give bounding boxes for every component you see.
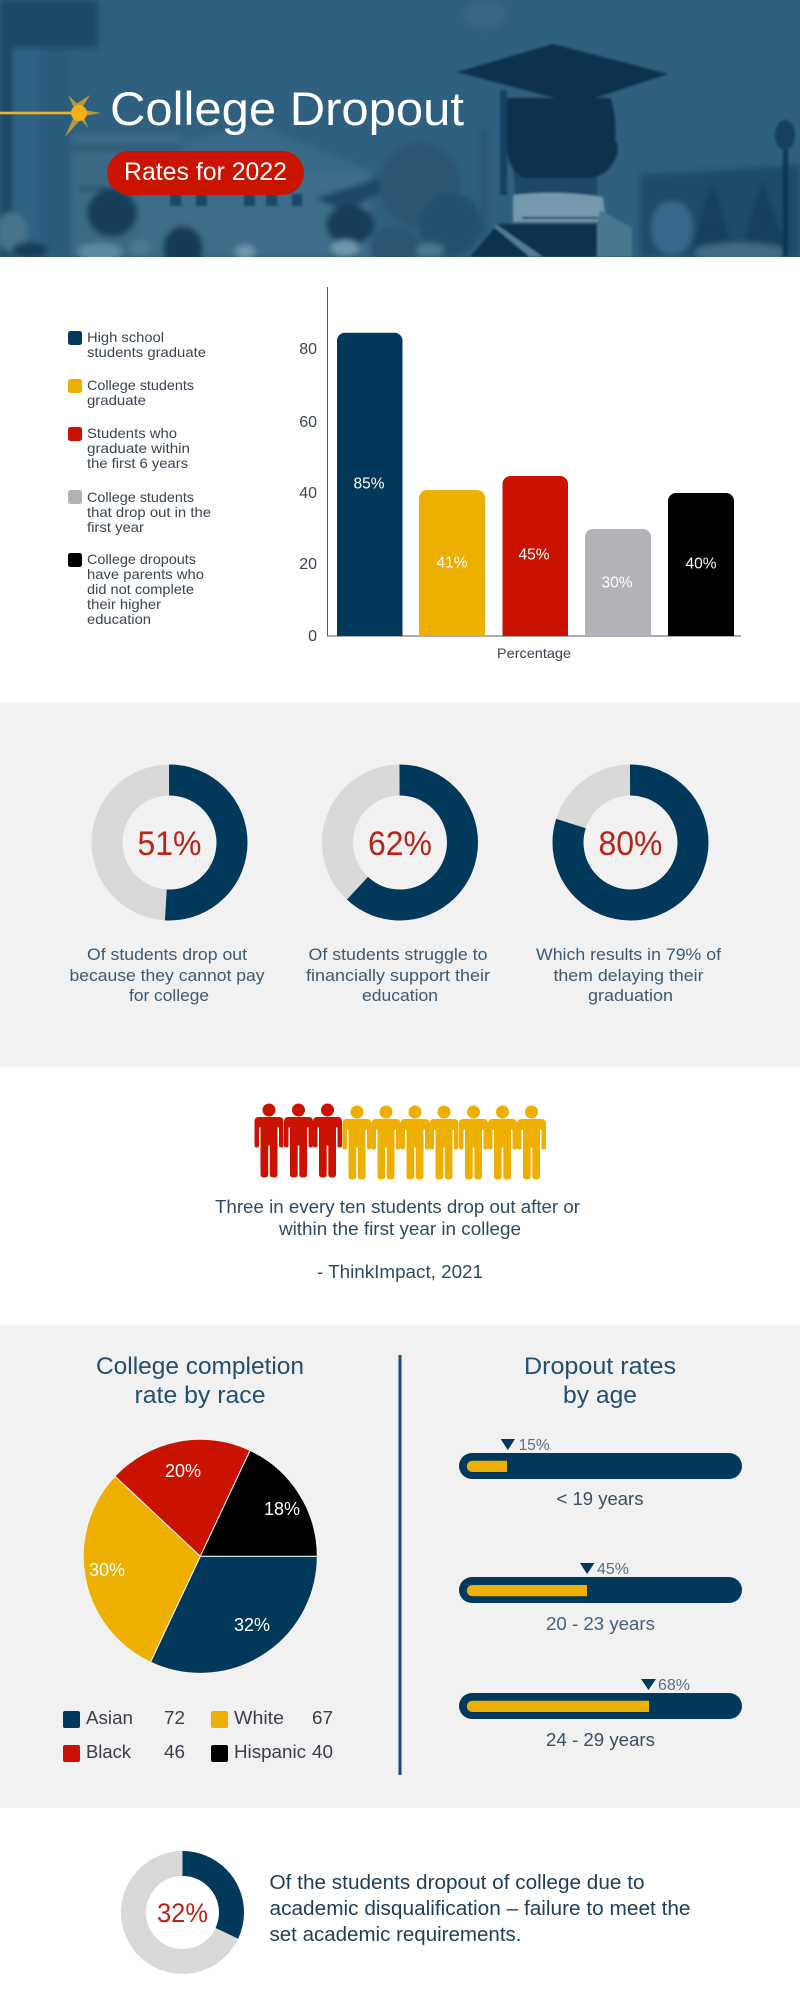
legend item: drop out first year: that drop out in the: [87, 504, 211, 520]
pie legend: 72: [164, 1708, 185, 1728]
progress bar: 20 to 23: [459, 1561, 742, 1634]
y axis labels: 40: [299, 485, 317, 502]
text: academic disqualification: academic disqualification – failure to meet the: [270, 1898, 690, 1920]
caption: 62%: education: [362, 986, 438, 1005]
pie chart: 20%: [165, 1461, 201, 1481]
pie legend: 40: [312, 1742, 333, 1762]
legend: bar chart: [68, 329, 211, 627]
caption: 80%: them delaying their: [554, 966, 704, 985]
caption: 51%: for college: [129, 986, 209, 1005]
donut: 62%: 62%: [368, 825, 432, 863]
bar: 45%: [502, 476, 568, 636]
x axis label: Percentage: [497, 645, 571, 661]
bar: 30%: [585, 529, 651, 636]
bar: 41%: 41%: [436, 554, 468, 572]
bar: 40%: [668, 493, 734, 636]
progress bar: 24 to 29: [459, 1677, 742, 1750]
pie chart: 18%: [264, 1499, 300, 1519]
legend item: high school: High school: [87, 329, 164, 345]
legend item: graduate within 6 years: [68, 425, 190, 471]
heading: dropout rates by age: Dropout rates: [524, 1353, 676, 1380]
caption: 51%: because they cannot pay: [70, 966, 265, 985]
legend item: drop out first year: College students: [87, 489, 194, 505]
bar: 85%: [337, 333, 402, 636]
legend item: parents without higher education: [68, 551, 204, 627]
donut: 80%: 80%: [598, 825, 662, 863]
heading: college completion: College completion: [96, 1353, 304, 1380]
bar: 40%: 40%: [685, 556, 717, 572]
pictogram: three in ten students: [254, 1104, 546, 1180]
pie chart: 30%: [89, 1560, 125, 1580]
title: College Dropout: [110, 82, 464, 135]
progress bar: 20 to 23: 45%: [597, 1561, 629, 1578]
legend item: parents without higher education: did not complete: [87, 581, 194, 597]
header banner: [0, 0, 800, 270]
text: academic disqualification: set academic requirements.: [270, 1924, 522, 1946]
legend item: college students graduate: [68, 377, 194, 408]
subtitle pill: Rates for 2022: [124, 158, 287, 186]
subtitle pill: [107, 151, 304, 195]
legend item: drop out first year: first year: [87, 519, 144, 535]
legend item: high school: [68, 329, 206, 360]
y axis labels: 80: [299, 341, 317, 358]
progress bar: 20 to 23: 20 - 23 years: [546, 1614, 655, 1634]
donut: 32% academic disqualification: [134, 1864, 232, 1962]
donut: 62%: [338, 780, 462, 905]
pie legend: [63, 1708, 333, 1762]
pie chart: 32%: [234, 1615, 270, 1635]
bar: 85%: 85%: [353, 476, 385, 492]
legend item: graduate within 6 years: Students who: [87, 425, 177, 441]
legend item: high school: students graduate: [87, 344, 206, 360]
pie chart: [83, 1439, 317, 1673]
source: ThinkImpact: - ThinkImpact, 2021: [317, 1262, 483, 1282]
donut: 80%: [568, 780, 693, 905]
heading: college completion: rate by race: [134, 1382, 266, 1409]
star with line: [0, 95, 101, 137]
y axis labels: 20: [299, 556, 317, 573]
legend item: graduate within 6 years: the first 6 years: [87, 455, 188, 471]
bar chart: [299, 287, 741, 661]
pie legend: Asian: [86, 1708, 133, 1728]
text: academic disqualification: Of the students dropout of college due to: [270, 1872, 644, 1894]
legend item: college students graduate: College students: [87, 377, 194, 393]
bar: 45%: 45%: [518, 546, 550, 564]
progress bar: 24 to 29: 24 - 29 years: [546, 1730, 655, 1750]
legend item: drop out first year: [68, 489, 211, 535]
text: academic disqualification: [270, 1872, 690, 1946]
legend item: parents without higher education: education: [87, 611, 151, 627]
y axis labels: 60: [299, 414, 317, 431]
panel: race and age: [0, 1325, 800, 1808]
pie legend: 67: [312, 1708, 333, 1728]
y axis labels: [299, 341, 317, 645]
donut: 51%: 51%: [138, 825, 202, 863]
legend item: graduate within 6 years: graduate within: [87, 440, 190, 456]
legend item: parents without higher education: College dropouts: [87, 551, 196, 567]
caption: 80%: graduation: [588, 986, 673, 1005]
caption: 62%: [306, 945, 490, 1005]
progress bar: under 19: [459, 1437, 742, 1509]
legend item: parents without higher education: have parents who: [87, 566, 204, 582]
heading: dropout rates by age: [524, 1353, 676, 1409]
bar: 30%: 30%: [601, 574, 633, 592]
donut: 32% academic disqualification: 32%: [157, 1898, 208, 1928]
legend item: parents without higher education: their higher: [87, 596, 161, 612]
caption: 51%: [70, 945, 265, 1005]
pie legend: 46: [164, 1742, 185, 1762]
caption: 80%: [536, 945, 721, 1005]
text: three in ten: Three in every ten students drop out after or: [215, 1197, 580, 1217]
panel: donut statistics: [0, 703, 800, 1067]
bar: 41%: [419, 490, 485, 636]
donut: 51%: [107, 780, 232, 905]
text: three in ten: [215, 1197, 580, 1239]
caption: 62%: Of students struggle to: [308, 945, 488, 964]
progress bar: under 19: 15%: [519, 1437, 550, 1454]
text: three in ten: within the first year in college: [278, 1219, 521, 1239]
caption: 51%: Of students drop out: [87, 945, 247, 964]
progress bar: 24 to 29: 68%: [658, 1677, 690, 1694]
pie legend: White: [234, 1708, 284, 1728]
caption: 62%: financially support their: [306, 966, 490, 985]
caption: 80%: Which results in 79% of: [536, 945, 721, 964]
pie legend: Hispanic: [234, 1742, 306, 1762]
heading: college completion: [96, 1353, 304, 1409]
pie legend: Black: [86, 1742, 132, 1762]
progress bar: under 19: < 19 years: [556, 1489, 644, 1509]
y axis labels: 0: [308, 628, 317, 645]
heading: dropout rates by age: by age: [563, 1382, 637, 1409]
legend item: college students graduate: graduate: [87, 392, 146, 408]
